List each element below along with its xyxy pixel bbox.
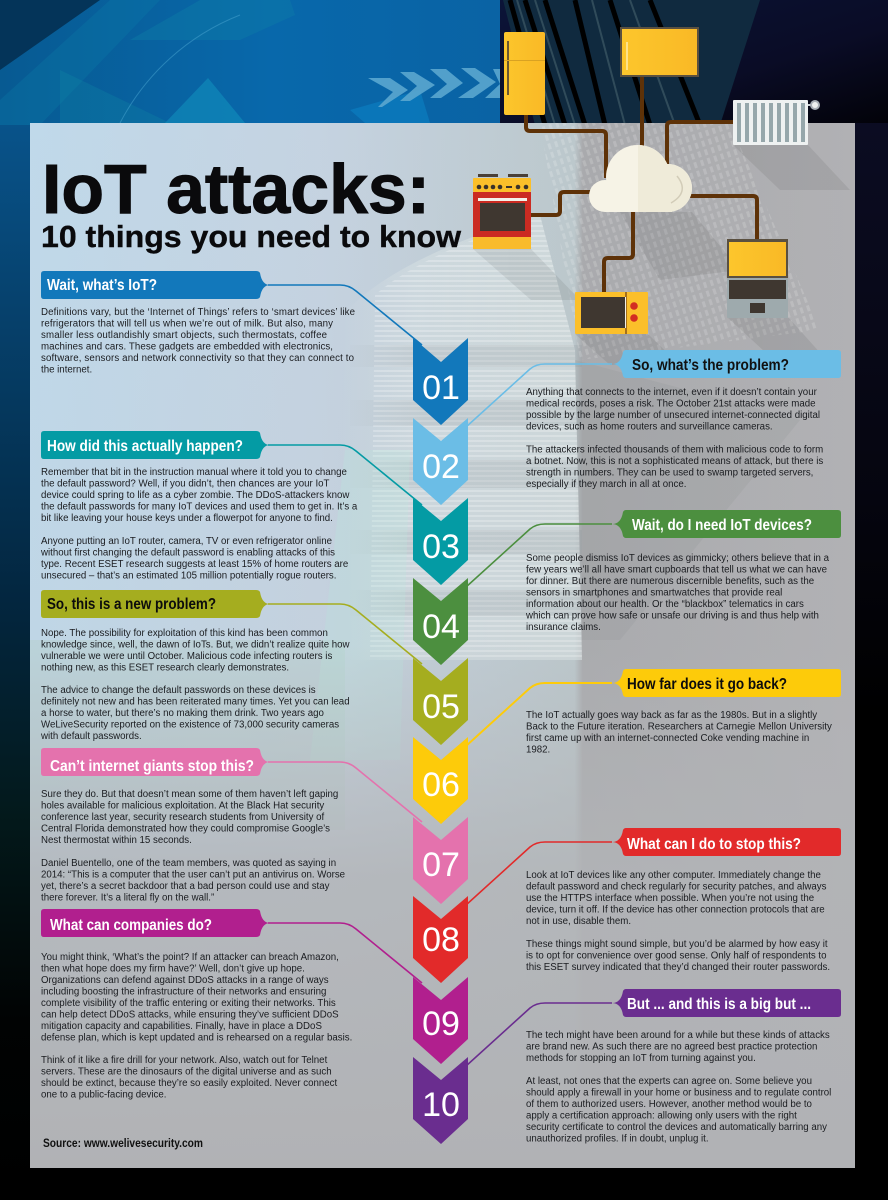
body 02: The attackers infected thousands of them with malicious code to form [526,444,823,456]
chevron 06 [413,737,468,824]
chevron 10 [413,1057,468,1144]
body 10: apply a certification approach: allowing only users with the right [526,1110,797,1122]
body 09: mitigation capacity and capabilities. Finally, have in place a DDoS [41,1021,322,1032]
cables [526,76,757,294]
body 04 [525,553,830,633]
chevron 01 [413,338,468,425]
body 01 [41,307,355,376]
body 07: there forever. It’s a literal fly on the wall.” [41,892,214,904]
body 02: possible by the large number of unsecured internet-connected digital [526,410,820,421]
body 03: Remember that bit in the instruction manual where it told you to change [41,467,347,478]
icon: microwave [575,292,648,334]
body 07: holes available for malicious exploitation. At the Black Hat security [41,800,324,812]
icon: radiator [733,100,820,145]
body 01: refrigerators that will tell us when we’re out of milk. But also, many [41,318,333,330]
body 03: Anyone putting an IoT router, camera, TV or even refrigerator online [41,536,332,547]
body 10: At least, not ones that the experts can agree on. Some believe you [526,1076,812,1087]
chevron 02 [413,418,468,505]
body 03: bit like leaving your house keys under a flowerpot for anyone to find. [41,513,333,524]
body 09: You might think, ‘What’s the point? If an attacker can breach Amazon, [41,952,339,963]
body 02 [526,387,823,490]
chevron 06: 06 [422,766,460,804]
body 01: Definitions vary, but the ‘Internet of Things’ refers to ‘smart devices’ like [41,307,355,318]
chevron 09: 09 [422,1005,460,1043]
body 07: yet, there’s a secret backdoor that a bad person could use and stay [41,881,330,892]
body 03: device could spring to life as a cyber zombie. The DDoS-attackers know [41,490,350,501]
body 02: a botnet. Now, this is not a sophisticated means of attack, but there is [526,456,823,467]
heading pill 03 [41,431,270,459]
body 05: definitely not new and has been reiterated many times. Yet you can lead [41,696,350,708]
body 08: is to opt for convenience over good sense. Only half of respondents to [526,950,826,962]
body 09 [41,952,352,1100]
background chevrons [368,68,505,107]
body 05: with default passwords. [40,731,142,742]
chevron 03: 03 [422,528,460,566]
body 09: then what hope does my firm have?’ Well, don’t give up hope. [41,964,305,974]
body 04: which can prove how safe or unsafe our driving is and thus help with [525,610,819,622]
heading pill 08 [612,828,841,856]
body 08: this ESET survey indicated that they’d changed their router passwords. [526,962,830,973]
heading pill 07: Can’t internet giants stop this? [50,758,254,775]
body 08: use the HTTPS interface when possible. When you’re not using the [526,893,814,904]
body 01: machines and cars. These gadgets are embedded with electronics, [41,342,333,352]
body 09: should be extinct, because they’re so easily exploited. Never connect [41,1078,337,1089]
panel: 07 Can't internet giants stop this? [41,748,345,904]
body 10 [526,1030,831,1144]
chevron 01: 01 [422,369,460,407]
heading pill 06 [612,669,841,697]
title: IoT attacks: [42,150,430,228]
heading pill 02 [612,350,841,378]
heading pill 10 [612,989,841,1017]
body 02: especially if they march in all at once. [526,479,686,490]
body 08: Look at IoT devices like any other computer. Immediately change the [526,870,821,881]
body 05: The advice to change the default passwords on these devices is [41,685,316,696]
icon: cloud [589,145,692,212]
body 10: unauthorized profiles. If in doubt, unplug it. [526,1134,709,1144]
icon: tv [620,27,699,77]
body 08: These things might sound simple, but you’d be alarmed by how easy it [526,939,828,950]
body 05: Nope. The possibility for exploitation of this kind has been common [41,628,328,639]
body 07 [41,789,345,904]
body 05: a horse to water, but there’s no making them drink. Two years ago [41,708,324,719]
body 02: medical records, poses a risk. The October 21st attacks were made [526,398,816,410]
body 03: the default passwords for many IoT devices and used them to get in. It’s a [41,502,358,512]
panel: 05 So, this is a new problem? [40,590,351,742]
body 08: default password and check regularly for security patches, and always [526,882,827,892]
chevron 05: 05 [422,688,460,726]
body 05: knowledge since, well, the dawn of IoTs. But, we didn’t realize quite how [41,640,351,650]
body 06: The IoT actually goes way back as far as the 1980s. But in a slightly [526,710,817,721]
body 09: complete visibility of the traffic entering or exiting their networks. This [41,998,336,1009]
body 07: 2014: “This is a computer that the user can’t put an antivirus on. Worse [41,870,345,880]
body 05: WeLiveSecurity reported on the existence of 73,000 security cameras [41,720,339,730]
body 10: security certificate to control the devices and automatically barring any [526,1122,827,1133]
chevron 03 [413,498,468,585]
body 02: devices, such as home routers and surveillance cameras. [526,422,773,432]
panel: 09 What can companies do? [41,909,352,1100]
body 09: defense plan, which is kept updated and is rehearsed on a regular basis. [41,1032,352,1044]
heading pill 01 [41,271,270,299]
panel: 01 Wait, what's IoT? [41,271,355,376]
body 07: Central Florida demonstrated how they could compromise Google’s [41,824,330,834]
body 10: The tech might have been around for a while but these kinds of attacks [526,1030,830,1041]
chevron 08 [413,896,468,983]
body 06: 1982. [526,744,550,756]
body 04: for dinner. But there are numerous discernible benefits, such as the [526,576,814,587]
body 03: the default password? Well, if you didn’t, then chances are your IoT [41,478,330,490]
body 08: not in use, disable them. [526,916,631,927]
body 08 [526,870,830,973]
chevron 04: 04 [422,608,460,646]
heading pill 06: How far does it go back? [627,676,787,693]
chevron 10: 10 [422,1086,460,1124]
body 04: sensors in smartphones and smartwatches that provide real [526,588,782,598]
heading pill 02: So, what’s the problem? [632,357,789,374]
body 03 [40,467,358,582]
body 03: type. Recent ESET research suggests at least 15% of home routers are [41,559,348,570]
body 09: Think of it like a fire drill for your network. Also, watch out for Telnet [41,1055,328,1066]
panel: 06 How far does it go back? [526,669,841,756]
heading pill 07 [41,748,270,776]
heading pill 04 [612,510,841,538]
illustration: connected devices around cloud [473,27,850,375]
heading pill 05 [41,590,270,618]
body 06 [526,710,832,756]
body 05: vulnerable we were until October. Malicious code infecting routers is [41,651,332,662]
chevron 07 [413,817,468,904]
body 06: Back to the Future iteration. Researchers at Carnegie Mellon University [526,722,832,732]
body 01: smaller less outlandishly smart objects, such thermostats, coffee [41,330,327,341]
source credit: Source: www.welivesecurity.com [43,1138,203,1150]
title: 10 things you need to know [41,219,462,254]
heading pill 08: What can I do to stop this? [627,836,801,853]
body 07: Sure they do. But that doesn’t mean some of them haven’t left gaping [41,789,338,800]
body 05: nothing new, as this ESET research clearly demonstrates. [41,662,289,674]
body 04: few years we’ll all have smart cupboards that tell us what we can have [526,564,827,576]
body 07: Daniel Buentello, one of the team members, was quoted as saying in [41,858,336,869]
body 02: Anything that connects to the internet, even if it doesn’t contain your [526,387,818,398]
chevron 08: 08 [422,921,460,959]
body 10: of them to authorized users. However, another method would be to [526,1099,812,1110]
heading pill 09: What can companies do? [50,917,212,934]
body 10: should apply a firewall in your home or business and to regulate control [526,1088,831,1098]
heading pill 09 [41,909,270,937]
chevron 07: 07 [422,846,460,884]
body 04: insurance claims. [526,622,601,633]
body 04: Some people dismiss IoT devices as gimmicky; others believe that in a [526,553,830,564]
panel: 10 But ... and this is a big but ... [526,989,841,1144]
panel: 02 So, what's the problem? [526,350,841,490]
icon: oven [473,174,531,249]
panel: 03 How did this actually happen? [40,431,358,582]
body 09: servers. These are the dinosaurs of the digital universe and as such [41,1066,332,1078]
body 02: strength in numbers. They can be used to swamp targeted servers, [526,468,813,478]
title [41,150,462,254]
body 10: methods for stopping an IoT from turning against you. [526,1053,756,1064]
body 03: unsecured – that’s an estimated 105 million potentially rogue routers. [41,570,336,582]
body 05 [40,628,351,742]
body 09: one to a public-facing device. [41,1090,166,1100]
body 03: without first changing the default password is enabling attacks of this [40,548,335,558]
body 09: Organizations can defend against DDoS attacks in a range of ways [41,975,329,986]
body 08: device, turn it off. If the device has other connection protocols that are [526,904,825,916]
chevron 05 [413,658,468,745]
panel: 04 Wait, do I need IoT devices? [525,510,841,633]
body 01: software, sensors and network connectivity so that they can connect to [41,353,354,364]
body 10: are brand new. As such there are no agreed best practice protection [526,1042,817,1052]
heading pill 05: So, this is a new problem? [47,596,216,613]
heading pill 10: But ... and this is a big but ... [627,996,811,1013]
body 07: Nest thermostat within 15 seconds. [41,835,192,846]
body 09: including boosting the infrastructure of their networks and ensuring [41,986,326,998]
chevron 09 [413,977,468,1064]
body 01: the internet. [41,364,92,376]
icon: laptop [727,239,788,318]
device shadows [473,145,850,375]
body 04: information about our health. Or the “blackbox” telematics in cars [526,599,804,610]
heading pill 04: Wait, do I need IoT devices? [632,517,812,534]
heading pill 01: Wait, what’s IoT? [47,277,157,294]
body 06: first came up with an internet-connected Coke vending machine in [526,733,809,744]
connector lines [268,285,612,1076]
chevron 02: 02 [422,448,460,486]
body 09: can help detect DDoS attacks, while ensuring they’ve sufficient DDoS [41,1010,339,1020]
icon: fridge [504,32,545,115]
body 07: conference last year, security research students from University of [41,812,325,823]
panel: 08 What can I do to stop this? [526,828,841,973]
heading pill 03: How did this actually happen? [47,438,243,455]
chevron 04 [413,578,468,665]
